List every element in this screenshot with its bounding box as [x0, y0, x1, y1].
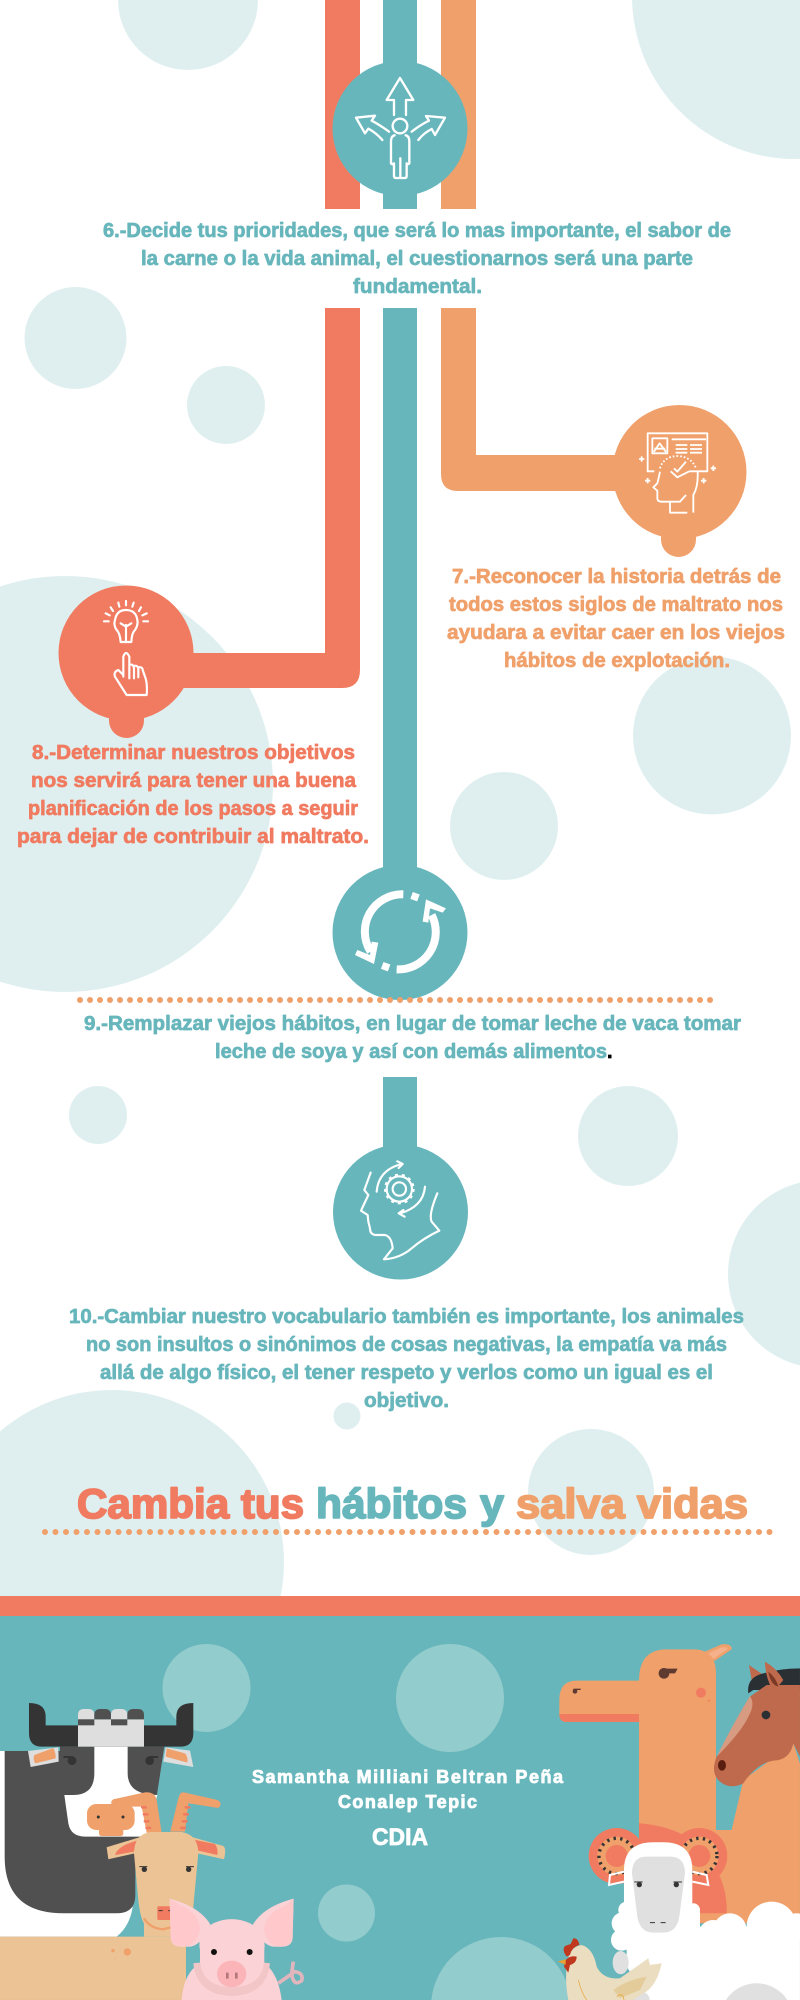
step 9 icon badge — [332, 865, 468, 1000]
step 7 text: hábitos de explotación. — [504, 650, 730, 672]
footer panel — [0, 1616, 800, 2000]
pig — [170, 1899, 302, 2000]
step 7 text: 7.-Reconocer la historia detrás de — [452, 566, 781, 588]
step 10 text: no son insultos o sinónimos de cosas negativas, la empatía va más — [86, 1334, 727, 1356]
icon: head with gear — [361, 1161, 439, 1259]
step 8 text: para dejar de contribuir al maltrato. — [17, 826, 369, 848]
step 7 text: ayudara a evitar caer en los viejos — [447, 622, 785, 644]
hen — [558, 1938, 662, 2000]
step 6 text: fundamental. — [353, 276, 482, 298]
goat ears — [107, 1836, 225, 1859]
step 9 text: 9.-Remplazar viejos hábitos, en lugar de tomar leche de vaca tomar — [84, 1013, 741, 1035]
sheep horns — [589, 1828, 727, 1884]
step 8 text: nos servirá para tener una buena — [31, 770, 357, 792]
step 9 text — [84, 1013, 741, 1063]
step 8 text: planificación de los pasos a seguir — [28, 798, 358, 820]
camel — [559, 1644, 732, 1923]
icon: person choosing between arrows — [356, 78, 445, 178]
connector: teal timeline — [383, 308, 417, 908]
step 10 text: objetivo. — [364, 1390, 449, 1412]
horse — [714, 1662, 800, 1923]
step 6 icon badge — [332, 61, 468, 196]
title: hábitos — [316, 1480, 467, 1527]
cow eyes — [63, 1756, 158, 1765]
animals left: cow, goat, pig — [0, 1703, 302, 2000]
sheep head — [609, 1842, 708, 1933]
dotted divider — [80, 997, 714, 1003]
title — [77, 1480, 748, 1527]
cow ears — [28, 1747, 193, 1767]
step 7 icon badge — [612, 405, 746, 557]
step 9 text: . — [607, 1041, 613, 1063]
step 10 text: allá de algo físico, el tener respeto y verlos como un igual es el — [100, 1362, 713, 1384]
author text — [252, 1767, 564, 1851]
sheep wool body — [611, 1902, 800, 2000]
step 8 icon badge — [58, 586, 194, 738]
icon: cycle arrows — [355, 892, 446, 971]
goat horns — [111, 1792, 221, 1833]
icon: head with check and document — [639, 433, 716, 513]
sheep gray parts — [613, 1951, 793, 2000]
step 10 text: 10.-Cambiar nuestro vocabulario también es importante, los animales — [69, 1306, 744, 1328]
step 7 text — [447, 566, 785, 672]
cow horns — [29, 1703, 193, 1747]
step 10 text — [69, 1306, 744, 1412]
footer circles — [162, 1644, 571, 2000]
step 6 text: 6.-Decide tus prioridades, que será lo mas importante, el sabor de — [103, 220, 731, 242]
title: salva vidas — [516, 1480, 748, 1527]
author text: Samantha Milliani Beltran Peña — [252, 1767, 564, 1787]
step 10 icon badge — [333, 1144, 468, 1280]
goat head and body — [0, 1832, 198, 2000]
step 6 text — [103, 220, 731, 298]
step 8 text — [17, 742, 369, 848]
connector: red timeline to step 8 — [150, 308, 360, 688]
cow body — [0, 1747, 164, 1937]
author text: Conalep Tepic — [338, 1792, 477, 1812]
animals right: camel, horse, sheep, hen — [558, 1644, 800, 2000]
icon: light bulb and pointing hand — [104, 601, 148, 695]
step 8 text: 8.-Determinar nuestros objetivos — [32, 742, 355, 764]
author text: CDIA — [372, 1824, 428, 1851]
footer band — [0, 1596, 800, 1616]
step 9 text: leche de soya y así con demás alimentos — [215, 1041, 607, 1063]
top bars — [325, 0, 476, 209]
connector: teal timeline lower — [383, 1077, 417, 1157]
title: Cambia tus — [77, 1480, 304, 1527]
connector: orange timeline to step 7 — [441, 308, 640, 491]
red neck patch — [639, 1823, 727, 1913]
step 6 text: la carne o la vida animal, el cuestionarnos será una parte — [141, 248, 693, 270]
title dotted underline — [45, 1529, 778, 1535]
title: y — [480, 1480, 505, 1527]
cow hair — [78, 1709, 144, 1747]
step 7 text: todos estos siglos de maltrato nos — [449, 594, 783, 616]
cow muzzle — [87, 1804, 135, 1836]
